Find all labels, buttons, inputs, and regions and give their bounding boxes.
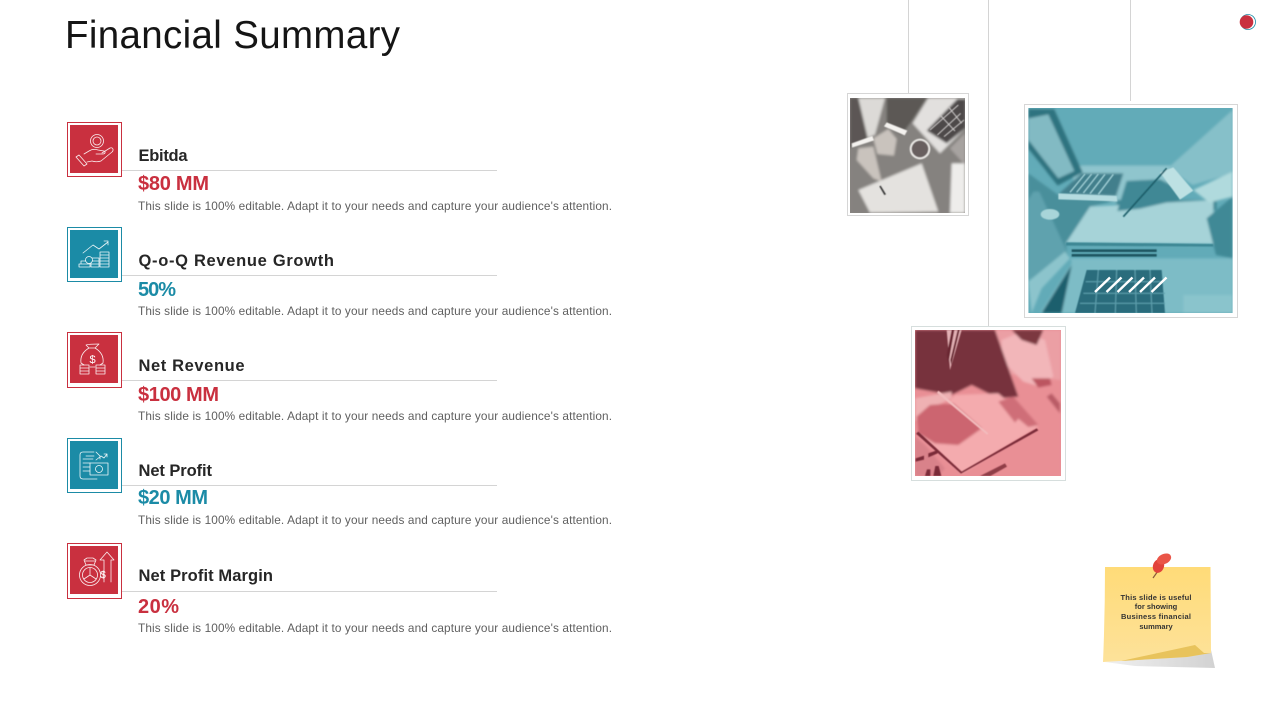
item: Net Revenue: $100 MM (138, 384, 219, 406)
item: Net Revenue (68, 332, 612, 423)
item: Ebitda: $80 MM (138, 173, 209, 195)
icon: red push pin (1151, 551, 1173, 578)
item: Q-o-Q Revenue Growth: 50% (138, 279, 176, 301)
icon: money bag gauge with arrow (68, 544, 122, 598)
note text: for showing (1135, 602, 1178, 611)
icon: report with banknote (68, 438, 122, 492)
item: Net Profit: Net Profit (138, 462, 212, 480)
photo: grey desk top view (848, 94, 968, 216)
item: Net Profit Margin: 20% (138, 596, 179, 618)
photo: red signing document (912, 326, 1066, 480)
note text: Business financial (1121, 612, 1191, 621)
decorative stripes (1095, 278, 1166, 292)
item: Net Profit Margin: This slide is 100% editable. Adapt it to your needs and capture your audience's attention. (138, 621, 612, 635)
photo: teal laptop and notes (1024, 104, 1238, 318)
item: Q-o-Q Revenue Growth: This slide is 100% editable. Adapt it to your needs and capture your audience's attention. (138, 304, 612, 318)
note text: This slide is useful (1120, 593, 1192, 602)
item: Net Revenue: Net Revenue (138, 357, 244, 375)
item: Net Profit (68, 438, 612, 527)
item: Net Profit: $20 MM (138, 487, 208, 509)
note text: summary (1139, 622, 1174, 631)
item: Net Revenue: This slide is 100% editable. Adapt it to your needs and capture your audience's attention. (138, 409, 612, 423)
note shadow (1105, 650, 1215, 668)
corner dot (1240, 14, 1256, 30)
note paper (1103, 567, 1211, 662)
note fold (1121, 645, 1211, 661)
connector strings (908, 0, 1130, 326)
note text (1120, 593, 1192, 631)
item: Ebitda: This slide is 100% editable. Adapt it to your needs and capture your audience's attention. (138, 199, 612, 213)
icon: money bag with coins (68, 332, 122, 388)
item: Q-o-Q Revenue Growth: Q-o-Q Revenue Growth (138, 252, 334, 270)
item: Ebitda: Ebitda (138, 147, 188, 165)
item: Net Profit Margin (68, 544, 612, 635)
item: Ebitda (68, 122, 612, 213)
icon: money bag with coins: $ (89, 354, 96, 366)
item: Net Profit Margin: Net Profit Margin (138, 567, 273, 585)
icon: hand holding coin (68, 122, 122, 176)
item: Q-o-Q Revenue Growth (68, 228, 612, 318)
title: Financial Summary (65, 14, 401, 57)
sticky note (1103, 551, 1215, 668)
icon: growth chart with coins (68, 228, 122, 282)
item: Net Profit: This slide is 100% editable. Adapt it to your needs and capture your audience's attention. (138, 513, 612, 527)
icon: money bag gauge with arrow: $ (100, 570, 106, 581)
